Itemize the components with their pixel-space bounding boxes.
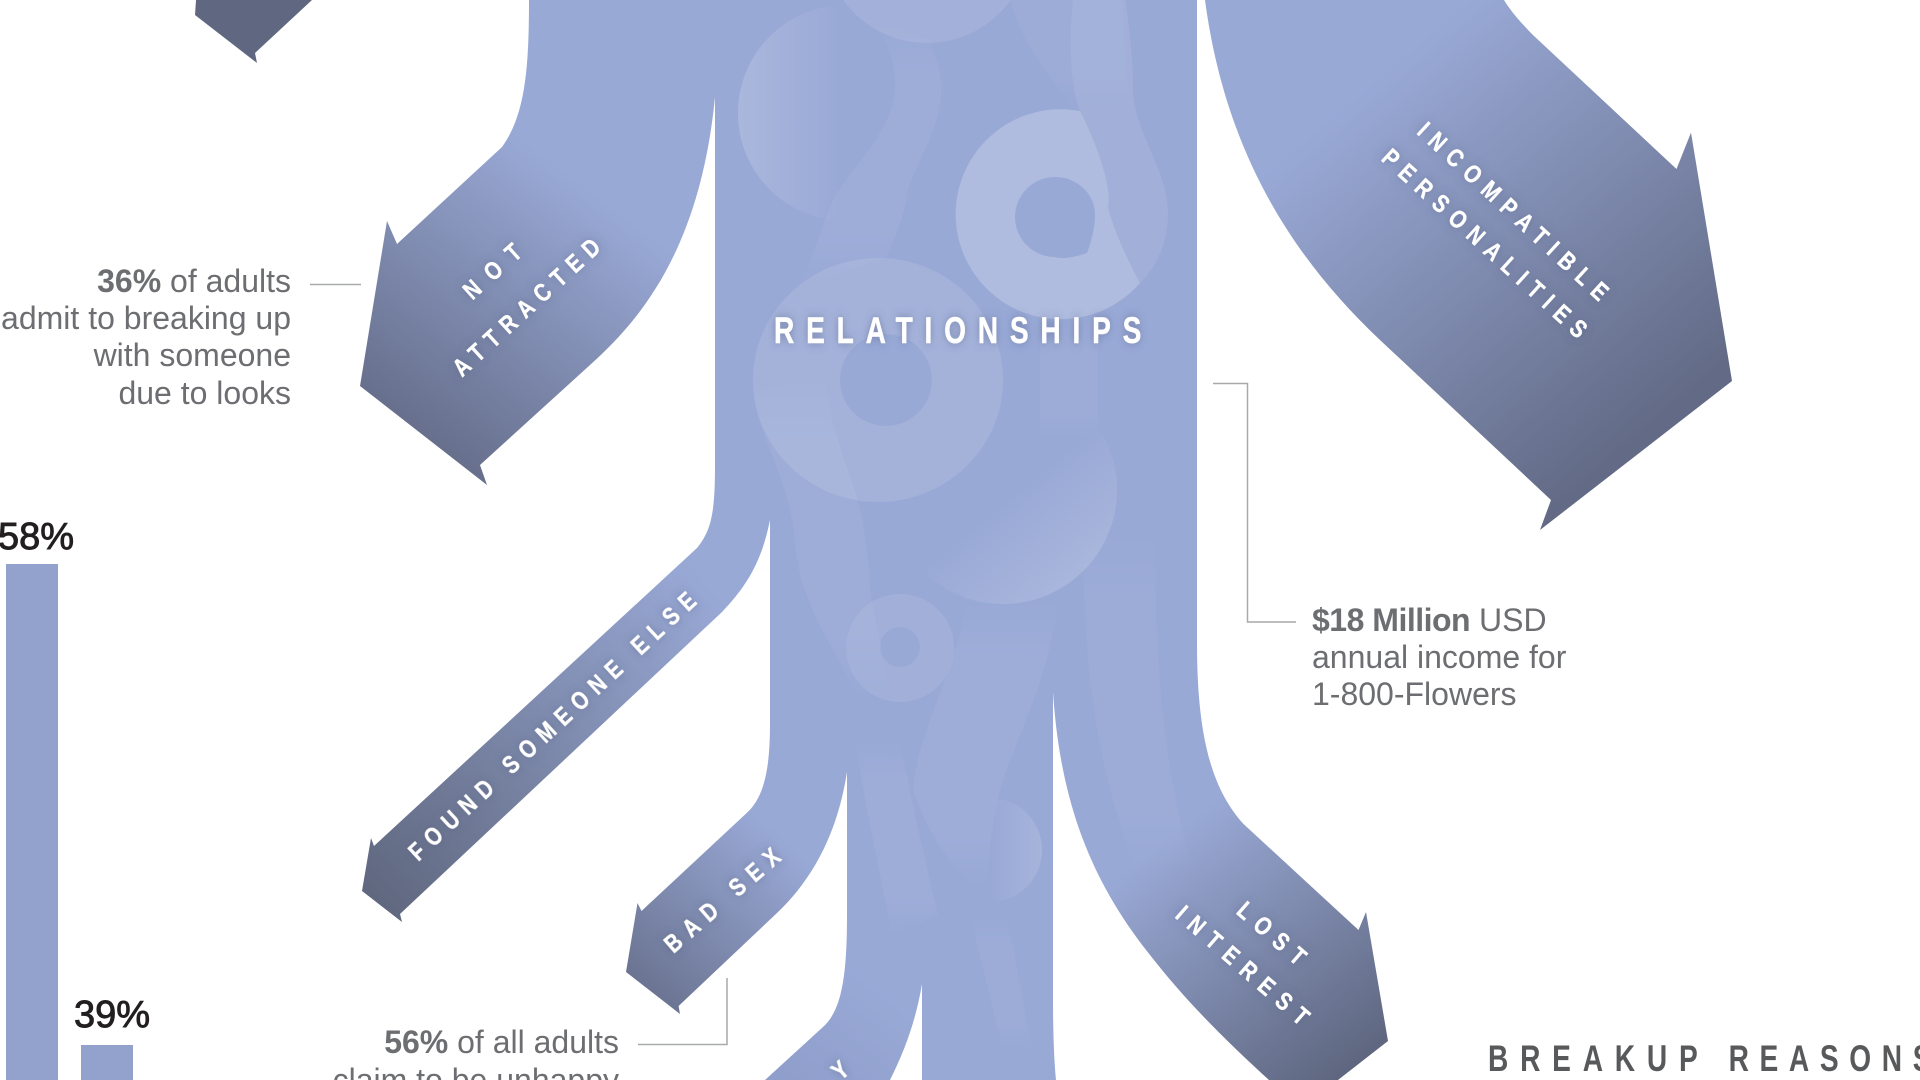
callout: 36% of adults: 36% of adults bbox=[97, 263, 291, 299]
callout: $18 million: annual income for bbox=[1312, 639, 1567, 675]
bar: 39%: 39% bbox=[74, 994, 150, 1036]
label: not attracted: NOT bbox=[457, 238, 527, 305]
arrow: partially visible lower branch bbox=[765, 900, 922, 1080]
arrow: partial arrow at top left bbox=[195, 0, 312, 63]
label: lost interest: LOST bbox=[1232, 896, 1312, 971]
bar: 58%: 58% bbox=[0, 516, 74, 558]
arrow: found someone else bbox=[362, 400, 770, 922]
label: lost interest: INTEREST bbox=[1170, 900, 1315, 1031]
arrow: bad sex bbox=[626, 700, 847, 1014]
callout: 36% of adults: with someone bbox=[93, 337, 291, 373]
callout: 36% of adults: due to looks bbox=[118, 375, 291, 411]
label: found someone else: FOUND SOMEONE ELSE bbox=[403, 586, 702, 866]
bar: 58% bbox=[0, 516, 74, 1080]
callout: $18 million: $18 Million USD bbox=[1312, 602, 1547, 638]
bar: 39% bbox=[74, 994, 150, 1080]
callout: 56% of all adults bbox=[333, 978, 727, 1080]
label: incompatible personalities: PERSONALITIES bbox=[1376, 143, 1593, 344]
arrow: not attracted bbox=[360, 0, 715, 485]
heading: relationships: RELATIONSHIPS bbox=[774, 309, 1153, 351]
bar chart bbox=[0, 516, 150, 1080]
label: not attracted: ATTRACTED bbox=[446, 232, 606, 382]
label: bad sex: BAD SEX bbox=[658, 842, 786, 958]
arrow: incompatible personalities bbox=[1205, 0, 1732, 530]
arrow: lost interest bbox=[1053, 630, 1388, 1080]
callout: 36% of adults bbox=[1, 263, 361, 411]
callout: 56% of all adults: 56% of all adults bbox=[384, 1024, 619, 1060]
callout: 36% of adults: admit to breaking up bbox=[1, 300, 291, 336]
label: incompatible personalities: INCOMPATIBLE bbox=[1412, 116, 1615, 306]
decorative ribbons and rings inside trunk bbox=[738, 0, 1190, 1050]
relationships trunk bbox=[715, 0, 1197, 1080]
callout: $18 million bbox=[1213, 384, 1567, 712]
callout: $18 million: 1-800-Flowers bbox=[1312, 676, 1517, 712]
